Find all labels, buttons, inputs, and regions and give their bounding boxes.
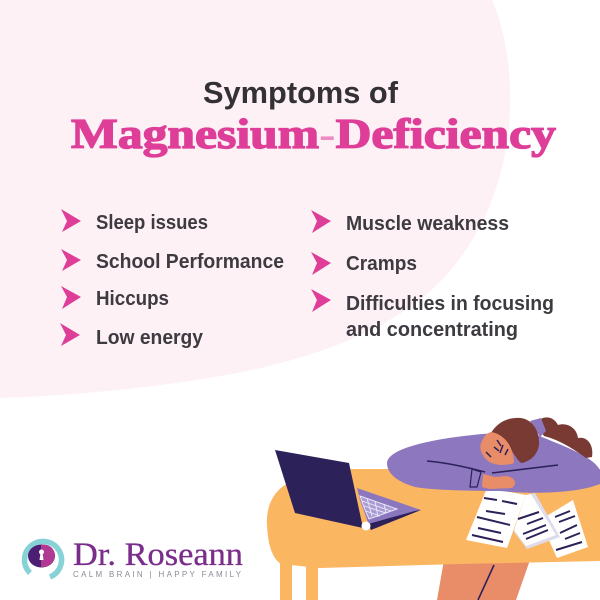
ponytail xyxy=(536,417,592,458)
desk legs xyxy=(280,560,318,600)
icon: arrow 1 xyxy=(61,209,81,232)
title: Magnesium -Deficiency xyxy=(71,112,556,158)
arm lines and hand xyxy=(427,461,558,489)
icon: arrow 4 xyxy=(60,323,80,346)
laptop xyxy=(275,450,421,530)
text: School Performance: School Performance xyxy=(96,251,284,273)
title xyxy=(71,75,556,158)
text: Muscle weakness: Muscle weakness xyxy=(346,213,509,235)
icon: arrow 7 xyxy=(311,289,331,312)
icon: arrow 5 xyxy=(311,210,331,233)
text: Difficulties in focusing: Difficulties in focusing xyxy=(346,293,554,315)
title: Symptoms of xyxy=(203,75,399,110)
text: Sleep issues: Sleep issues xyxy=(96,212,208,234)
text: Hiccups: Hiccups xyxy=(96,288,169,310)
icon: arrow 2 xyxy=(61,249,81,271)
logo wordmark: Dr. Roseann xyxy=(73,537,243,573)
logo xyxy=(25,537,243,579)
text: Low energy: Low energy xyxy=(96,327,204,349)
papers xyxy=(466,488,588,558)
student legs xyxy=(437,560,530,600)
text: and concentrating: and concentrating xyxy=(346,319,518,341)
face xyxy=(480,432,514,465)
list: right column xyxy=(311,210,554,341)
logo icon xyxy=(25,541,62,577)
list: left column xyxy=(60,209,284,349)
icon: arrow 6 xyxy=(311,252,331,275)
illustration: student asleep at desk xyxy=(267,417,600,600)
sweater body xyxy=(387,432,600,493)
desk xyxy=(267,469,600,568)
icon: arrow 3 xyxy=(61,286,81,309)
logo tagline: CALM BRAIN | HAPPY FAMILY xyxy=(73,570,242,579)
hair xyxy=(491,418,539,463)
background pink blob xyxy=(0,0,510,398)
text: Cramps: Cramps xyxy=(346,253,417,275)
